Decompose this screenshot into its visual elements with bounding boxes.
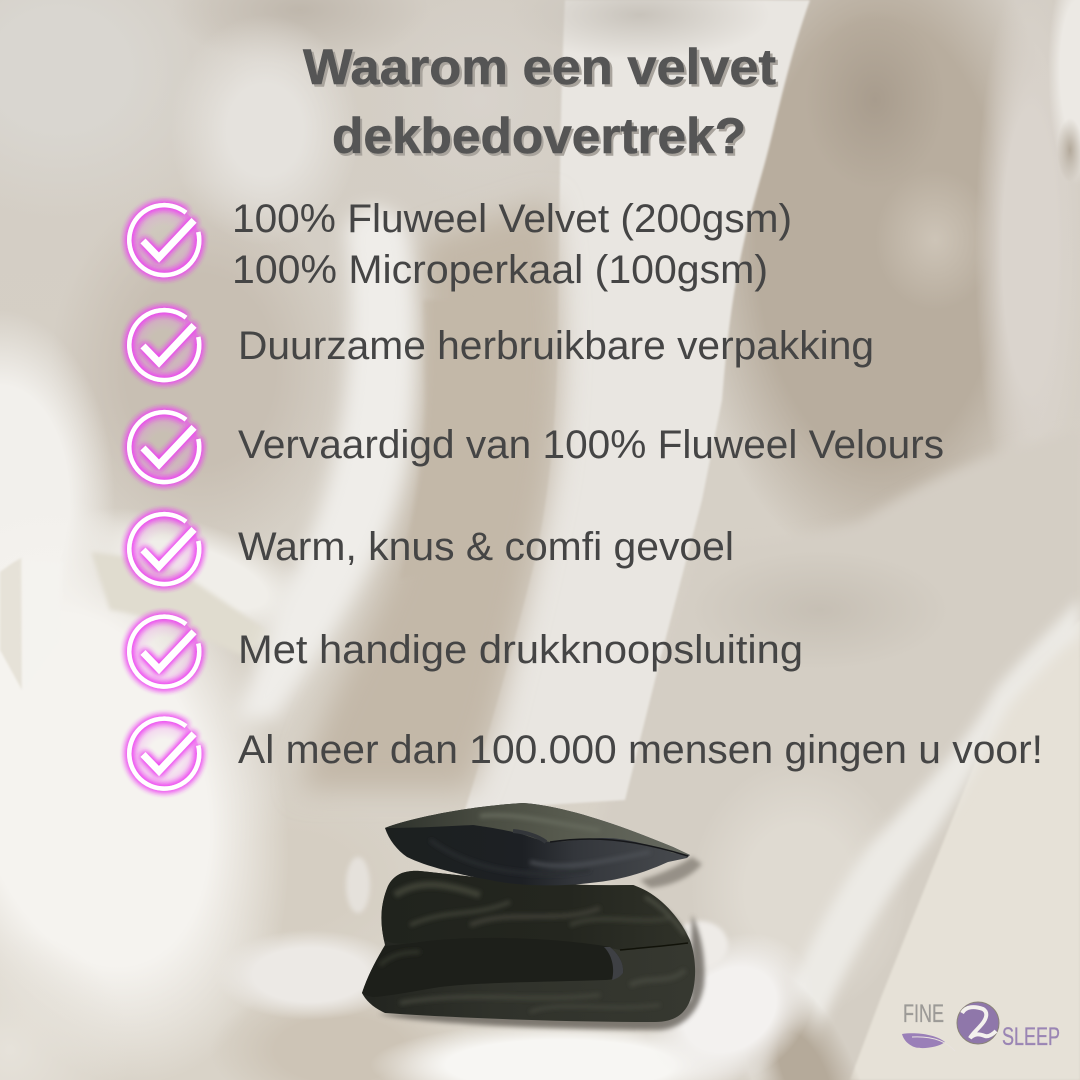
text: comfort: Warm, knus & comfi gevoel (238, 525, 734, 569)
icon: glowing check 5 (129, 616, 199, 687)
text: closure: Met handige drukknoopsluiting (238, 628, 803, 672)
duvet velvet sheen (380, 885, 685, 1012)
title line one: Waarom een velvet (303, 39, 776, 95)
text: material lines: 100% Microperkaal (100gsm) (232, 248, 768, 292)
title (303, 39, 779, 166)
icon: purple feather (902, 1033, 955, 1051)
tan fold beside the band (300, 200, 560, 790)
text: customers: Al meer dan 100.000 mensen gingen u voor! (238, 728, 1043, 772)
pillow (385, 803, 690, 885)
list item 2 (129, 310, 874, 380)
central bright band (465, 0, 810, 810)
icon: glowing check 4 (129, 514, 199, 584)
list item 4 (129, 514, 734, 584)
icon: glowing check 3 (129, 412, 199, 482)
folded duvet (362, 871, 695, 1022)
product photo: folded velvet duvet and pillow (362, 803, 704, 1030)
icon: glowing check 6 (129, 718, 199, 789)
title shadow line two: dekbedovertrek? (334, 110, 748, 166)
logo badge with 2 (957, 1002, 999, 1044)
lower-right fabric (600, 430, 1080, 1080)
pillow shadow (640, 857, 702, 888)
icon: glowing check 1 (129, 205, 199, 275)
text: material lines (232, 197, 792, 292)
text: packaging: Duurzame herbruikbare verpakking (238, 324, 874, 368)
text: material lines: 100% Fluweel Velvet (200gsm) (232, 197, 792, 241)
duvet shadow (378, 915, 704, 1030)
title shadow line one: Waarom een velvet (306, 42, 779, 98)
text: velours: Vervaardigd van 100% Fluweel Velours (238, 423, 944, 467)
bright fold left of title (235, 208, 415, 720)
list item 1 (129, 197, 792, 292)
title line two: dekbedovertrek? (332, 108, 746, 164)
logo: Fine 2 Sleep (902, 1000, 1060, 1051)
logo word FINE: FINE (903, 1000, 944, 1028)
list item 3 (129, 412, 944, 482)
list item 6 (129, 718, 1043, 789)
icon: glowing check 2 (129, 310, 199, 380)
list item 5 (129, 616, 803, 687)
